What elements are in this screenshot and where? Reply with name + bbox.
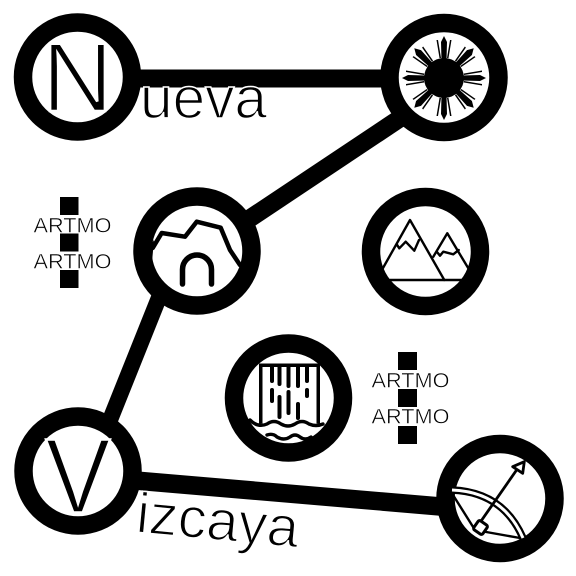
label group: ARTMO left: ARTMO — [34, 214, 111, 238]
label group: ARTMO right: ARTMO — [372, 370, 450, 392]
circle: letter N — [23, 22, 132, 132]
circle: letter V — [24, 416, 132, 536]
circle: letter N: N — [42, 23, 113, 132]
label group: ARTMO left: ARTMO — [34, 250, 111, 274]
circle: mountains icon — [371, 197, 480, 306]
label group: ARTMO right — [372, 352, 450, 444]
label group: ARTMO right: ARTMO — [372, 406, 450, 428]
word: izcaya: izcaya — [134, 481, 302, 560]
circle: sun icon — [390, 23, 498, 132]
word: ueva: ueva — [140, 66, 268, 131]
circle: waterfall icon — [234, 344, 343, 452]
circle: cave icon — [142, 196, 252, 306]
connector lines between circles — [100, 78, 470, 509]
label group: ARTMO left — [34, 197, 111, 288]
circle: bow and arrow icon — [446, 444, 554, 553]
circle: letter V: V — [46, 418, 111, 536]
